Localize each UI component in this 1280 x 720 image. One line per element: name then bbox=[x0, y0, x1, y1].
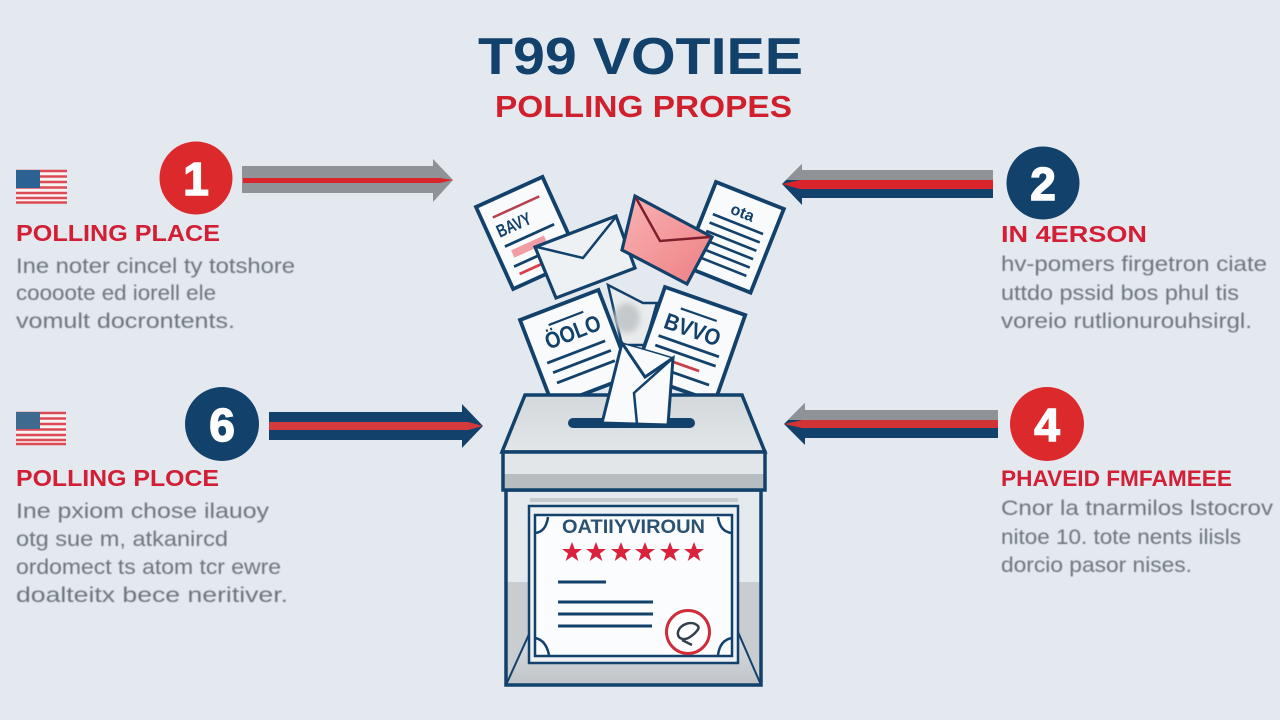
description text: doalteitx bece neritiver. bbox=[16, 584, 288, 607]
description text: uttdo pssid bos phul tis bbox=[1001, 282, 1239, 305]
description text: Ine noter cincel ty totshore bbox=[16, 255, 295, 278]
box body bbox=[506, 490, 761, 685]
number badge 2: 2 bbox=[1030, 158, 1056, 210]
ballot paper: middle right bbox=[635, 287, 745, 402]
ballot paper: top right bbox=[683, 182, 784, 293]
description text: hv-pomers firgetron ciate bbox=[1001, 253, 1267, 276]
number badge 6: 6 bbox=[209, 399, 235, 451]
icon: US flag bbox=[16, 170, 67, 203]
illustration: ballots and box bbox=[476, 177, 784, 685]
number badge 4 bbox=[1010, 387, 1084, 461]
arrow: step 4 to ballot bbox=[784, 403, 998, 445]
certificate title: OATIIYVIROUN bbox=[562, 517, 705, 538]
arrow: step 1 to ballot bbox=[242, 159, 453, 202]
number badge 1 bbox=[160, 142, 232, 214]
ballot paper: middle right: BVVO bbox=[661, 308, 724, 351]
panel: step 6 bbox=[16, 387, 483, 607]
number badge 2 bbox=[1006, 146, 1080, 220]
ballot paper: top left: BAVY bbox=[493, 208, 534, 242]
ballot slot bbox=[568, 418, 695, 428]
subtitle: POLLING PROPES bbox=[495, 89, 792, 124]
description text bbox=[16, 255, 295, 333]
folded ballot: back bbox=[608, 285, 657, 345]
description text: coooote ed iorell ele bbox=[16, 282, 216, 305]
heading: polling place: POLLING PLACE bbox=[16, 220, 220, 246]
description text: otg sue m, atkanircd bbox=[16, 528, 228, 551]
description text: dorcio pasor nises. bbox=[1001, 554, 1192, 577]
number badge 1: 1 bbox=[183, 153, 209, 205]
description text: voreio rutlionurouhsirgl. bbox=[1001, 310, 1252, 333]
box lid band bbox=[503, 452, 765, 490]
ballot paper: middle left bbox=[520, 290, 631, 406]
number badge 4: 4 bbox=[1034, 399, 1060, 451]
ballot paper: middle left: ÖOLO bbox=[541, 309, 604, 354]
ballot paper: top left bbox=[476, 177, 580, 289]
arrow: step 2 to ballot bbox=[782, 164, 993, 205]
box lid top bbox=[502, 395, 765, 452]
description text: vomult docrontents. bbox=[16, 310, 235, 333]
panel: step 4 bbox=[784, 387, 1274, 577]
title: T99 VOTIEE bbox=[478, 28, 803, 86]
description text bbox=[1001, 253, 1267, 333]
heading: garbled label: PHAVEID FMFAMEEE bbox=[1001, 466, 1232, 491]
description text: nitoe 10. tote nents ilisls bbox=[1001, 526, 1241, 549]
panel: step 2 bbox=[782, 146, 1267, 333]
number badge 6 bbox=[185, 387, 259, 461]
description text bbox=[1001, 497, 1274, 577]
description text bbox=[16, 500, 288, 607]
folded ballot entering slot bbox=[602, 343, 673, 425]
description text: ordomect ts atom tcr ewre bbox=[16, 556, 281, 579]
envelope: white bbox=[535, 216, 635, 298]
description text: Ine pxiom chose ilauoy bbox=[16, 500, 270, 523]
arrow: step 6 to ballot bbox=[269, 404, 483, 448]
certificate bbox=[529, 506, 738, 663]
row of stars bbox=[562, 542, 704, 561]
heading: in person: IN 4ERSON bbox=[1001, 221, 1147, 247]
ballot paper: top right: ota bbox=[728, 201, 757, 226]
certificate text lines bbox=[558, 582, 653, 626]
heading: polling ploce: POLLING PLOCE bbox=[16, 465, 219, 491]
certificate seal bbox=[666, 610, 710, 654]
envelope: red bbox=[622, 196, 712, 284]
icon: US flag bbox=[16, 412, 66, 445]
ballot box bbox=[502, 343, 765, 685]
description text: Cnor la tnarmilos lstocrov bbox=[1001, 497, 1274, 520]
panel: step 1 bbox=[16, 142, 453, 333]
